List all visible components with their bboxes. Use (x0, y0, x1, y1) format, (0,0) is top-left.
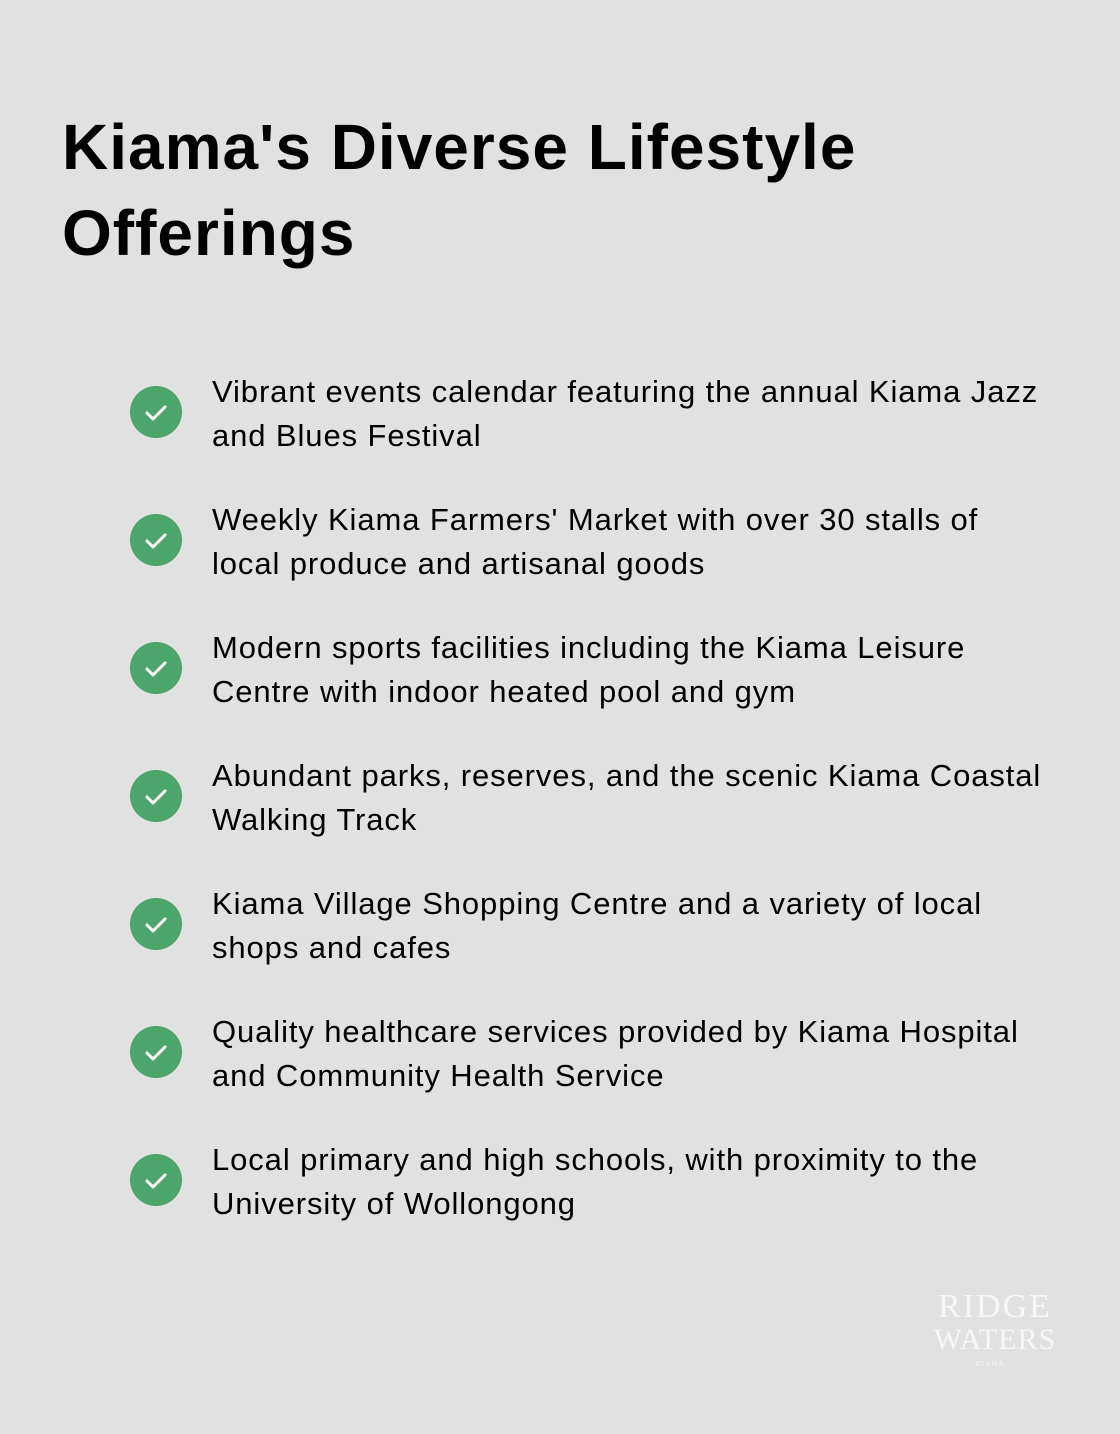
text: Centre with indoor heated pool and gym (212, 674, 796, 709)
text (212, 374, 1038, 453)
item 5 (130, 886, 982, 965)
icon: check (130, 1154, 182, 1206)
text (212, 1014, 1019, 1093)
icon: check (130, 514, 182, 566)
item 6 (130, 1014, 1019, 1093)
text: Quality healthcare services provided by Kiama Hospital (212, 1014, 1019, 1049)
logo: KIAMA (976, 1360, 1004, 1368)
icon: check (130, 770, 182, 822)
item 2 (130, 502, 978, 581)
icon: check (130, 1026, 182, 1078)
text: and Blues Festival (212, 418, 482, 453)
icon: check (130, 898, 182, 950)
item 1 (130, 374, 1038, 453)
text: Vibrant events calendar featuring the annual Kiama Jazz (212, 374, 1038, 409)
title: Kiama's Diverse Lifestyle (62, 111, 856, 183)
text: University of Wollongong (212, 1186, 576, 1221)
item 4 (130, 758, 1041, 837)
text: shops and cafes (212, 930, 451, 965)
text (212, 886, 982, 965)
text: and Community Health Service (212, 1058, 664, 1093)
logo: RIDGE (938, 1288, 1052, 1325)
item 7 (130, 1142, 978, 1221)
text: Walking Track (212, 802, 417, 837)
logo: WATERS (934, 1323, 1056, 1356)
text (212, 502, 978, 581)
text: Local primary and high schools, with proximity to the (212, 1142, 978, 1177)
text: Kiama Village Shopping Centre and a variety of local (212, 886, 982, 921)
title (62, 111, 856, 269)
icon: check (130, 642, 182, 694)
item 3 (130, 630, 965, 709)
text: Abundant parks, reserves, and the scenic Kiama Coastal (212, 758, 1041, 793)
icon: check (130, 386, 182, 438)
text (212, 1142, 978, 1221)
text: Weekly Kiama Farmers' Market with over 30 stalls of (212, 502, 978, 537)
text: local produce and artisanal goods (212, 546, 705, 581)
text (212, 758, 1041, 837)
text (212, 630, 965, 709)
title: Offerings (62, 197, 355, 269)
text: Modern sports facilities including the Kiama Leisure (212, 630, 965, 665)
logo (934, 1288, 1056, 1368)
